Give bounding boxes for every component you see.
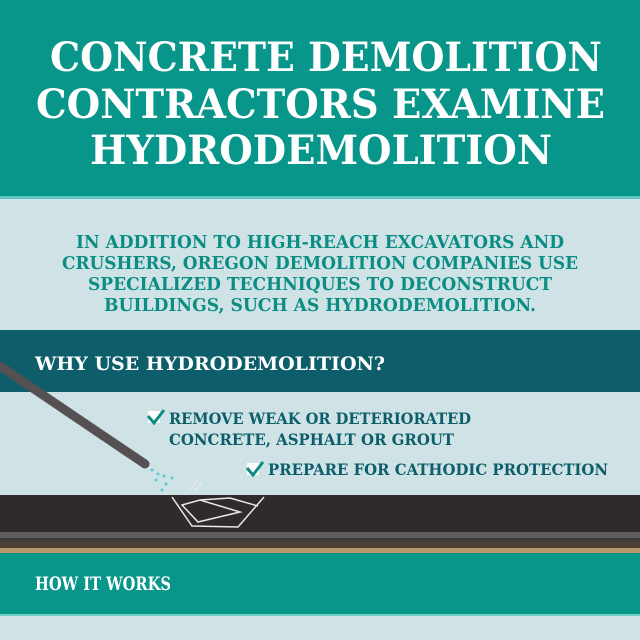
intro text (62, 232, 578, 316)
intro text: IN ADDITION TO HIGH-REACH EXCAVATORS AND (76, 232, 564, 253)
title: CONCRETE DEMOLITION (50, 34, 602, 81)
section bar: how it works (0, 553, 640, 616)
title (36, 34, 605, 174)
intro text: SPECIALIZED TECHNIQUES TO DECONSTRUCT (88, 274, 553, 295)
intro text: BUILDINGS, SUCH AS HYDRODEMOLITION. (104, 295, 536, 316)
section bar: how it works: HOW IT WORKS (35, 573, 171, 595)
item 1: REMOVE WEAK OR DETERIORATED (169, 409, 471, 428)
icon: broken concrete (172, 478, 264, 527)
section bar: why use (0, 330, 640, 392)
item 2: PREPARE FOR CATHODIC PROTECTION (268, 460, 608, 479)
title: CONTRACTORS EXAMINE (36, 81, 605, 128)
icon: water lance (0, 366, 174, 492)
ground layers (0, 495, 640, 553)
intro text: CRUSHERS, OREGON DEMOLITION COMPANIES USE (62, 253, 578, 274)
checklist (148, 409, 608, 479)
section bar: why use: WHY USE HYDRODEMOLITION? (34, 353, 385, 375)
item 1: CONCRETE, ASPHALT OR GROUT (169, 430, 454, 449)
item 1 (148, 409, 471, 449)
title: HYDRODEMOLITION (90, 127, 552, 174)
header panel (0, 0, 640, 199)
